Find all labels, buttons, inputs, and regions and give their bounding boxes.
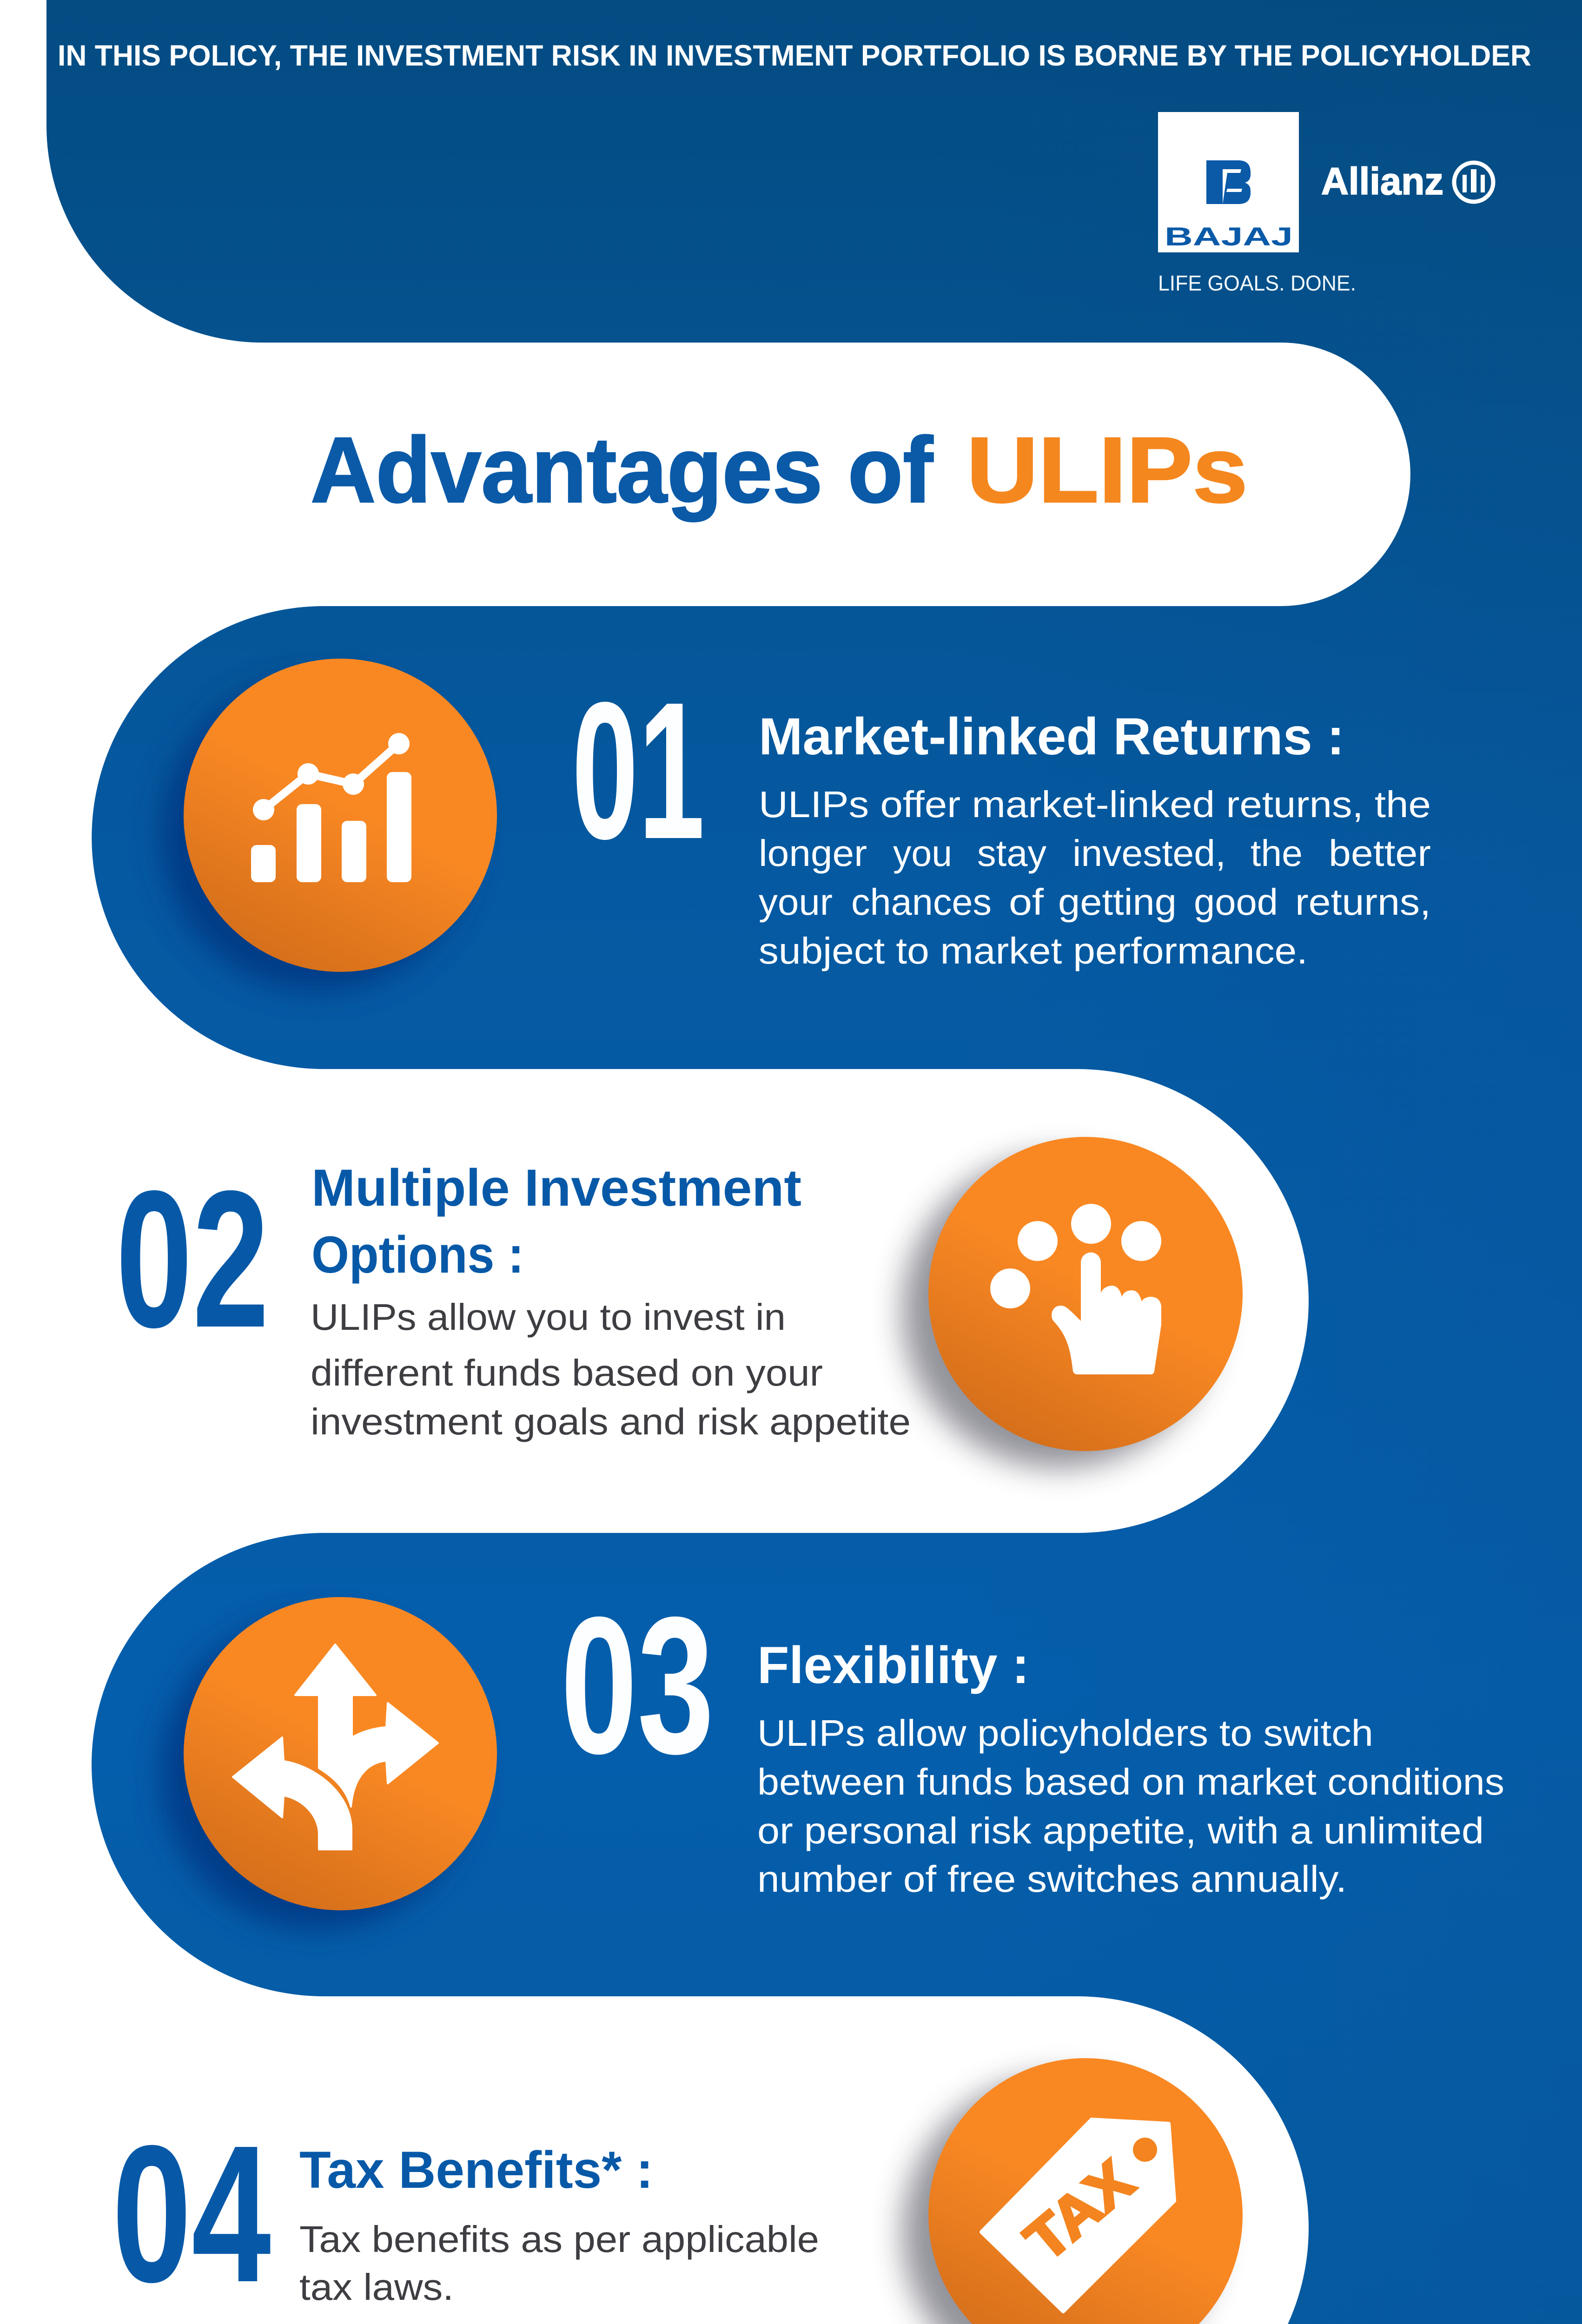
logo: BAJAJ wordmark: BAJAJ <box>1165 222 1293 251</box>
logo: Bajaj white box <box>1158 112 1299 252</box>
body text: different funds based on your <box>311 1352 823 1393</box>
body text: or personal risk appetite, with a unlimited <box>757 1810 1484 1851</box>
body text <box>759 784 1431 971</box>
body text: invested, <box>1072 832 1226 874</box>
body text: better <box>1329 832 1431 874</box>
heading: Market-linked Returns : <box>759 707 1344 766</box>
body text: ULIPs offer market-linked returns, the <box>759 784 1431 825</box>
title: Advantages of <box>311 418 933 522</box>
body text: investment goals and risk appetite <box>311 1401 911 1442</box>
body text: Tax benefits as per applicable <box>299 2218 819 2260</box>
icon: hand selecting options <box>902 1137 1243 1468</box>
logo: Allianz wordmark: Allianz <box>1321 160 1443 203</box>
body text <box>757 1712 1504 1900</box>
panel: 03 flexibility <box>92 1533 1582 1996</box>
body text: of <box>1009 881 1044 923</box>
panel: 01 market-linked returns <box>92 606 1582 1069</box>
body text: subject to market performance. <box>759 930 1308 971</box>
title: ULIPs <box>966 418 1248 522</box>
icon: branching arrows <box>160 1597 497 1930</box>
body text: longer <box>759 832 867 874</box>
tagline: LIFE GOALS. DONE. <box>1158 271 1356 295</box>
body text <box>299 2218 819 2308</box>
body text: you <box>893 832 952 874</box>
body text: good <box>1194 881 1278 923</box>
logo: Allianz emblem <box>1454 163 1493 202</box>
disclaimer heading: IN THIS POLICY, THE INVESTMENT RISK IN INVESTMENT PORTFOLIO IS BORNE BY THE POLICYHOLDER <box>58 40 1531 72</box>
body text: getting <box>1058 881 1177 923</box>
body text: returns, <box>1295 881 1431 923</box>
panel: 02 multiple investment options <box>0 1069 1309 1533</box>
number 03: 03 <box>561 1577 714 1795</box>
title <box>311 418 1248 522</box>
body text: number of free switches annually. <box>757 1858 1347 1900</box>
body text: your <box>759 881 833 923</box>
body text: ULIPs allow policyholders to switch <box>757 1712 1373 1754</box>
icon: tax tag <box>902 2058 1243 2324</box>
body text: between funds based on market conditions <box>757 1761 1504 1802</box>
icon: market chart <box>160 659 497 991</box>
number 01: 01 <box>572 662 705 880</box>
number 02: 02 <box>116 1150 269 1368</box>
heading: Multiple Investment <box>311 1159 801 1217</box>
number 04: 04 <box>112 2105 272 2323</box>
logo: Bajaj Allianz <box>1158 112 1493 295</box>
heading: Flexibility : <box>757 1636 1029 1694</box>
body text: tax laws. <box>299 2266 454 2308</box>
body text: chances <box>851 881 992 923</box>
heading <box>311 1159 801 1284</box>
body text: the <box>1251 832 1303 874</box>
logo: B mark <box>1206 160 1251 204</box>
heading: Tax Benefits* : <box>299 2141 653 2199</box>
body text: stay <box>977 832 1046 874</box>
icon: tax tag: TAX <box>1013 2148 1145 2274</box>
body text: ULIPs allow you to invest in <box>311 1296 786 1338</box>
body text <box>311 1296 911 1442</box>
panel: 04 tax benefits <box>0 1996 1309 2324</box>
heading: Options : <box>311 1226 524 1284</box>
